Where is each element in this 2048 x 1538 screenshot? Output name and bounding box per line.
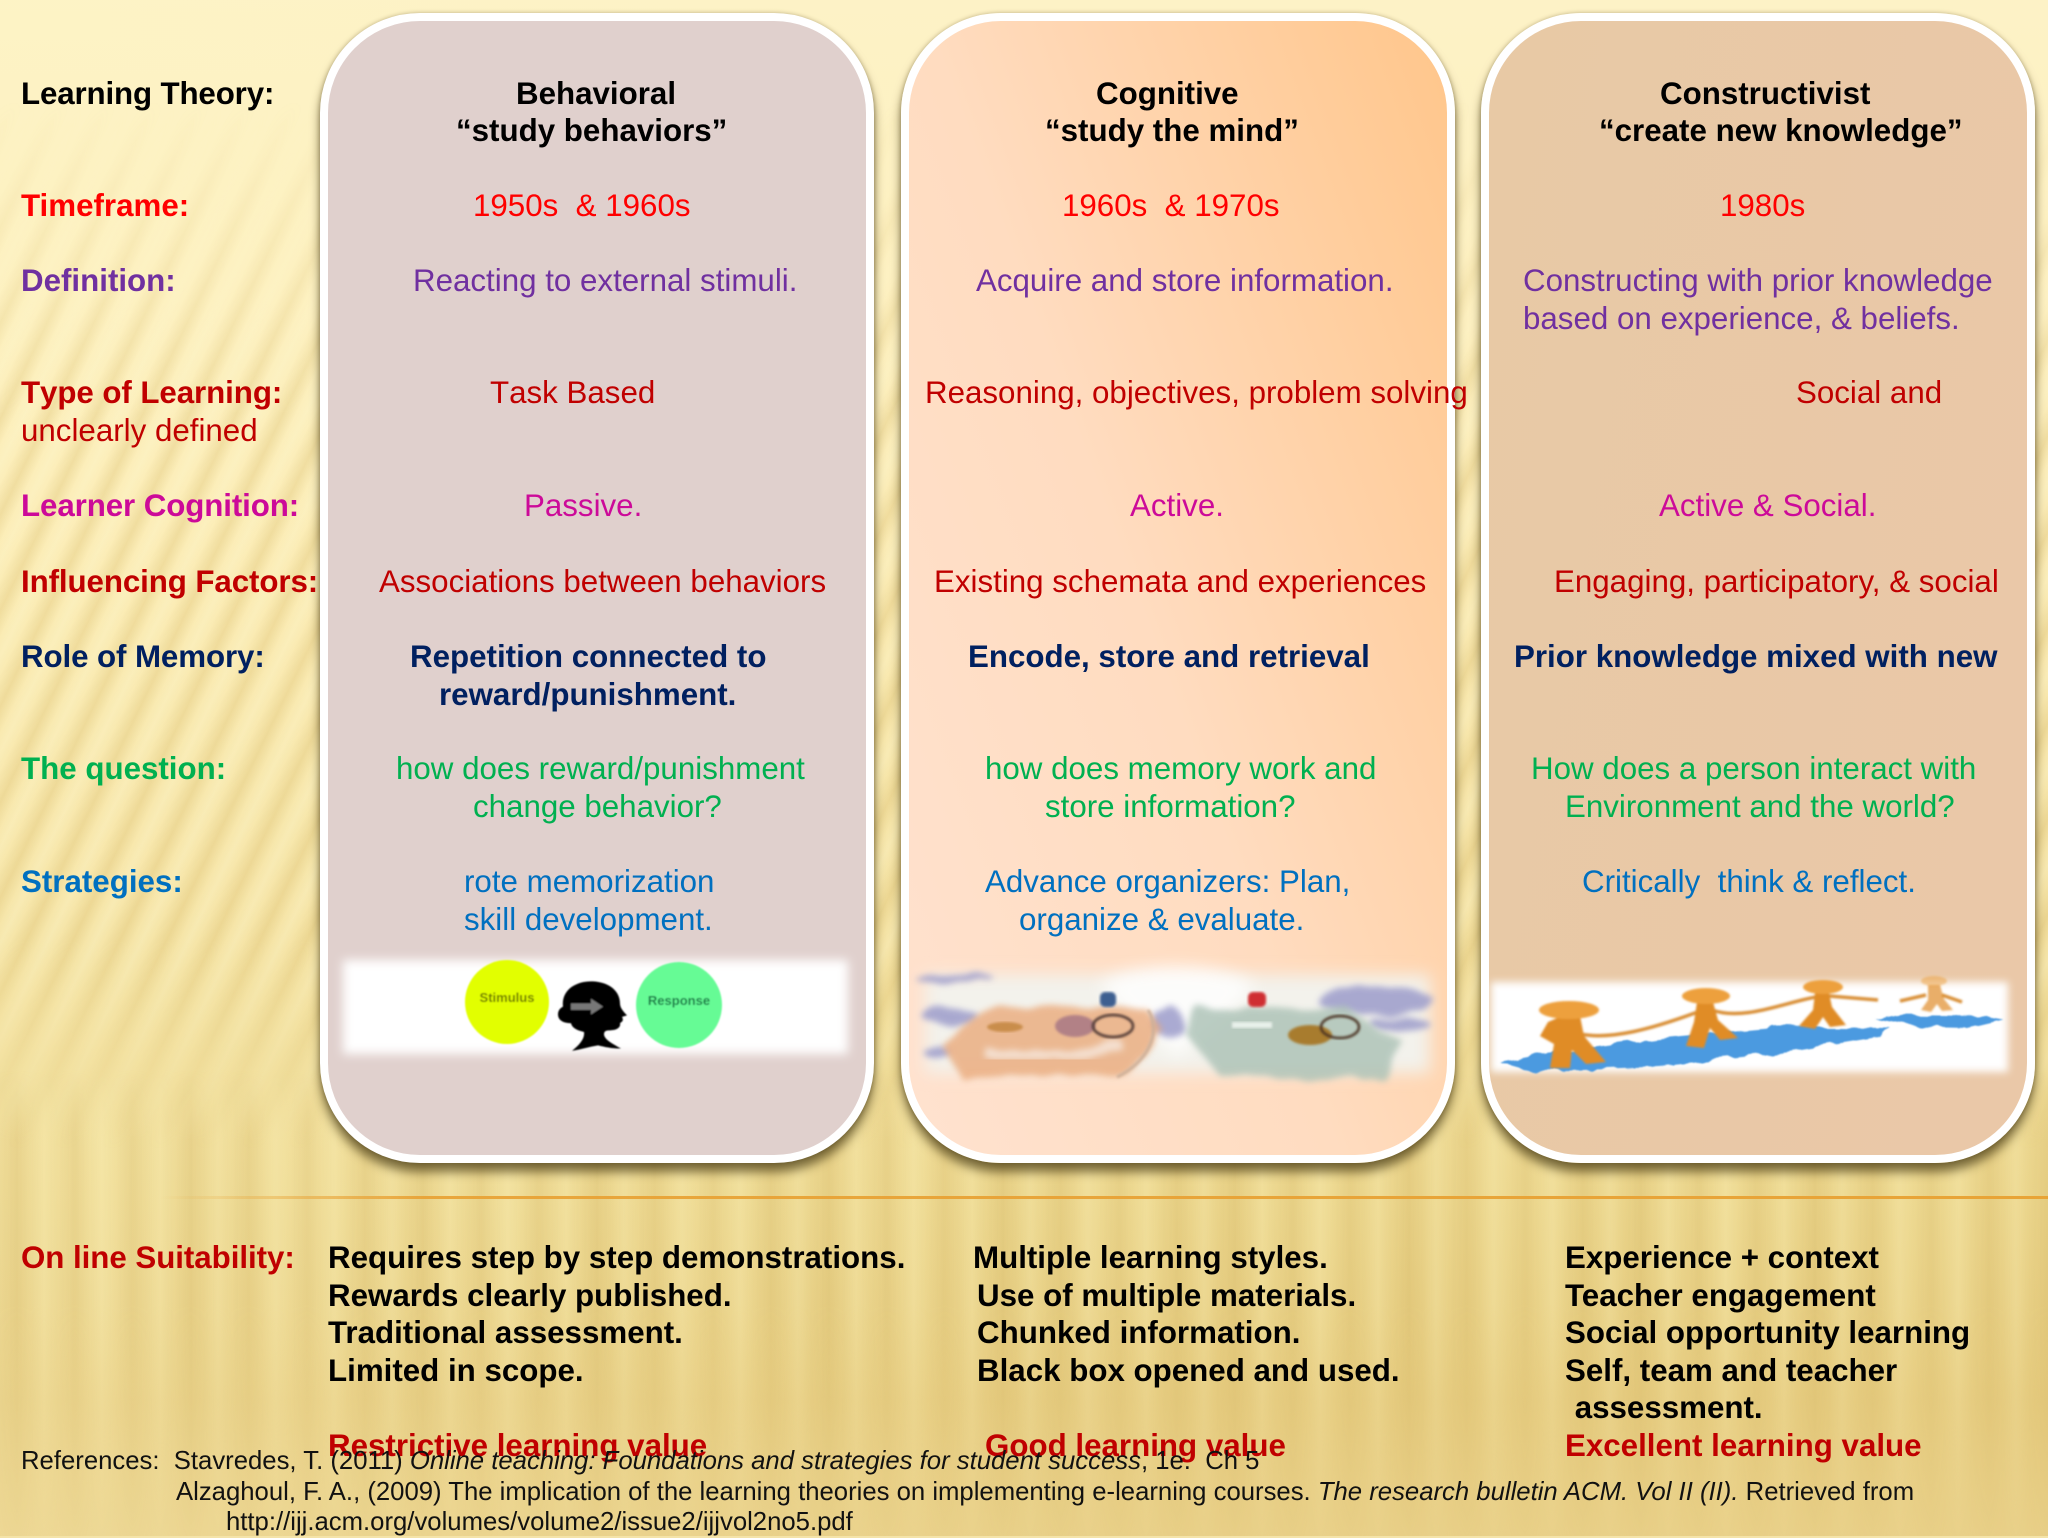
label: online suitability: On line Suitability: [21, 1240, 295, 1275]
influencing factors: Existing schemata and experiences [934, 564, 1426, 599]
the question: how does memory work and [985, 751, 1376, 786]
role of memory: Prior knowledge mixed with new [1514, 639, 1997, 674]
image: two heads with gears [914, 958, 1439, 1085]
strategies: organize & evaluate. [1019, 902, 1304, 936]
type of learning: Social and [1796, 375, 1942, 410]
learner cognition: Passive. [524, 488, 642, 523]
suitability: cognitive: Multiple learning styles. [973, 1240, 1328, 1275]
the question [985, 751, 1376, 824]
suitability: behavioral [328, 1240, 905, 1462]
heading: constructivist: Constructivist [1660, 76, 1870, 110]
label: influencing factors: Influencing Factors: [21, 564, 318, 599]
learner cognition: Active. [1130, 488, 1224, 523]
strategies: Advance organizers: Plan, [985, 864, 1350, 899]
icon: response circle [636, 962, 722, 1048]
the question: How does a person interact with [1531, 751, 1976, 786]
panel: constructivist [1481, 13, 2035, 1163]
suitability: constructivist: Experience + context [1565, 1240, 1879, 1275]
heading: behavioral [456, 76, 727, 148]
icon: response circle: Response [648, 993, 710, 1008]
suitability: behavioral: Limited in scope. [328, 1352, 584, 1388]
suitability: cognitive [973, 1240, 1400, 1462]
role of memory [410, 639, 766, 712]
role of memory: reward/punishment. [439, 676, 736, 712]
suitability: behavioral: Restrictive learning value [328, 1428, 707, 1462]
the question: how does reward/punishment [396, 751, 805, 786]
suitability: constructivist: Excellent learning value [1565, 1428, 1922, 1462]
strategies [985, 864, 1350, 936]
label: definition: Definition: [21, 263, 176, 298]
panel: behavioral [320, 13, 874, 1163]
definition: based on experience, & beliefs. [1523, 300, 1960, 336]
icon: stimulus circle [465, 960, 549, 1044]
type of learning: Task Based [490, 375, 655, 410]
references [21, 1447, 1914, 1536]
icon: left head [940, 992, 1163, 1077]
heading: cognitive: Cognitive [1096, 76, 1239, 110]
suitability: cognitive: Chunked information. [977, 1315, 1300, 1350]
image: stimulus response [338, 956, 852, 1058]
image: figures on puzzle [1489, 975, 2013, 1077]
definition [1523, 263, 1993, 336]
references: http://ijj.acm.org/volumes/volume2/issue2/ijjvol2no5.pdf [226, 1508, 853, 1536]
heading: constructivist [1599, 76, 1963, 148]
timeframe: 1980s [1720, 188, 1805, 223]
suitability: cognitive: Good learning value [985, 1428, 1286, 1462]
panel: cognitive [901, 13, 1455, 1163]
label: type of learning: unclearly defined [21, 412, 258, 448]
heading: cognitive [1045, 76, 1299, 148]
strategies: rote memorization [464, 864, 714, 899]
influencing factors: Associations between behaviors [379, 564, 826, 599]
heading: constructivist: “create new knowledge” [1599, 113, 1963, 148]
suitability: behavioral: Rewards clearly published. [328, 1278, 732, 1312]
strategies: skill development. [464, 902, 713, 936]
suitability: cognitive: Black box opened and used. [977, 1352, 1400, 1388]
icon: stimulus circle: Stimulus [480, 990, 534, 1005]
strategies [464, 864, 714, 936]
icon: orange figures [1539, 976, 1962, 1068]
label: timeframe: Timeframe: [21, 188, 189, 223]
suitability: constructivist [1565, 1240, 1970, 1462]
suitability: constructivist: assessment. [1575, 1390, 1763, 1425]
the question: change behavior? [473, 788, 722, 824]
the question [1531, 751, 1976, 824]
timeframe: 1950s & 1960s [473, 188, 691, 223]
the question: store information? [1045, 788, 1296, 824]
the question: Environment and the world? [1565, 788, 1955, 824]
label: type of learning [21, 375, 282, 448]
icon: head silhouette [558, 981, 627, 1051]
type of learning: Reasoning, objectives, problem solving [925, 375, 1468, 410]
suitability: behavioral: Requires step by step demonstrations. [328, 1240, 905, 1275]
suitability: constructivist: Social opportunity learning [1565, 1315, 1970, 1350]
label: role of memory: Role of Memory: [21, 639, 265, 674]
suitability: constructivist: Self, team and teacher [1565, 1352, 1897, 1388]
role of memory: Encode, store and retrieval [968, 639, 1370, 674]
icon: right head [1182, 992, 1404, 1077]
definition: Reacting to external stimuli. [413, 263, 797, 298]
heading: cognitive: “study the mind” [1045, 113, 1299, 148]
timeframe: 1960s & 1970s [1062, 188, 1280, 223]
influencing factors: Engaging, participatory, & social [1554, 564, 1999, 599]
label: strategies: Strategies: [21, 864, 183, 899]
suitability: cognitive: Use of multiple materials. [977, 1278, 1356, 1312]
label: learning theory: Learning Theory: [21, 76, 274, 110]
references: Alzaghoul, F. A., (2009) The implication of the learning theories on implementing e-learning courses. The research bulletin ACM. Vol II (II). Retrieved from [176, 1478, 1914, 1506]
icon: blue puzzle path [1499, 1015, 2004, 1071]
learner cognition: Active & Social. [1659, 488, 1876, 523]
definition: Constructing with prior knowledge [1523, 263, 1993, 298]
the question [396, 751, 805, 824]
role of memory: Repetition connected to [410, 639, 766, 674]
label: the question: The question: [21, 751, 226, 786]
suitability: constructivist: Teacher engagement [1565, 1278, 1876, 1312]
heading: behavioral: “study behaviors” [456, 113, 727, 148]
heading: behavioral: Behavioral [516, 76, 676, 110]
suitability: behavioral: Traditional assessment. [328, 1315, 683, 1350]
references: References: Stavredes, T. (2011) Online teaching: Foundations and strategies for student success, 1e. Ch 5 [21, 1447, 1259, 1475]
definition: Acquire and store information. [976, 263, 1394, 298]
label: type of learning: Type of Learning: [21, 375, 282, 410]
label: learner cognition: Learner Cognition: [21, 488, 299, 523]
strategies: Critically think & reflect. [1582, 864, 1916, 899]
